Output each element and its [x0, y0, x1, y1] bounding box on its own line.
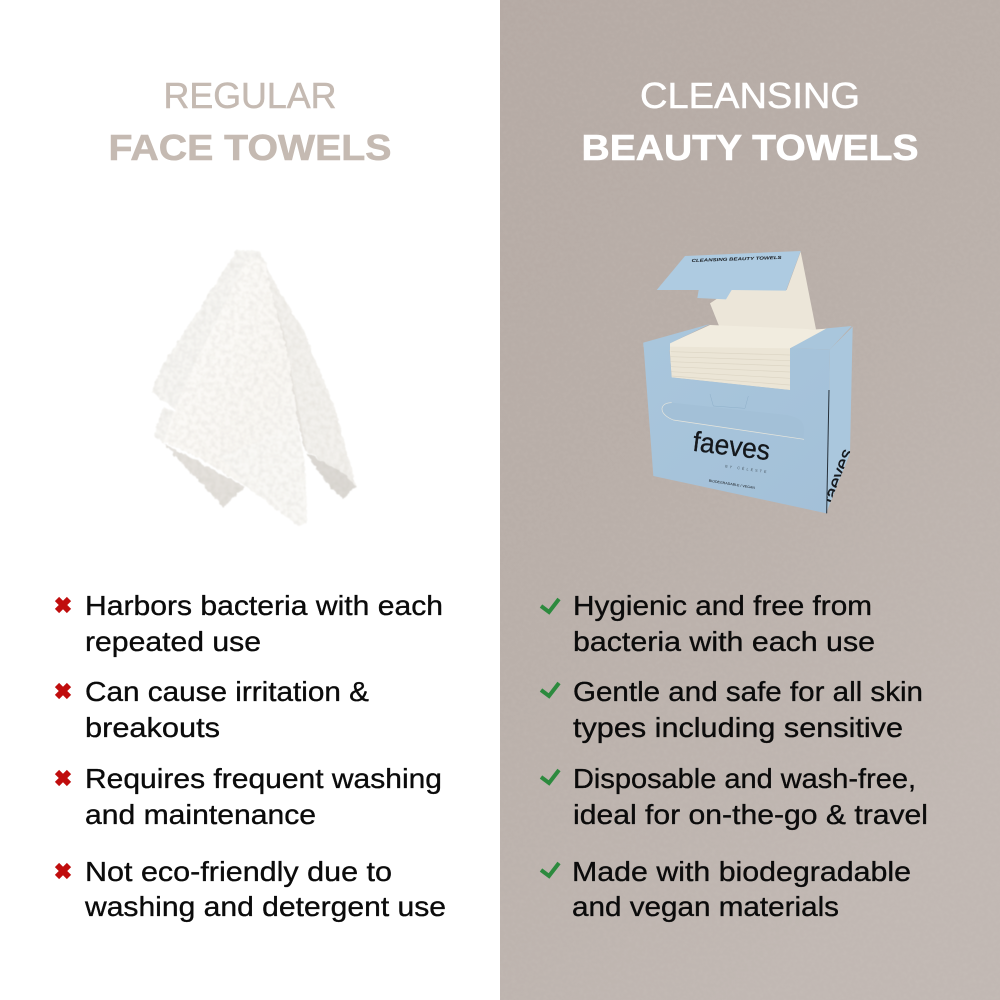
item: can cause irritation: breakouts	[85, 712, 220, 743]
icon: white towel photo	[152, 250, 356, 526]
item: harbors bacteria: Harbors bacteria with each	[85, 590, 443, 621]
brand text: BIODEGRADABLE / VEGAN	[709, 479, 756, 490]
item: requires washing: and maintenance	[85, 799, 316, 830]
panel: regular face towels	[0, 0, 500, 1000]
item: harbors bacteria: repeated use	[85, 626, 261, 657]
item: gentle: types including sensitive	[573, 712, 903, 743]
box top and side	[643, 324, 710, 350]
item: biodegradable: and vegan materials	[572, 891, 839, 922]
item: requires washing	[57, 763, 442, 830]
item: not eco-friendly: washing and detergent use	[84, 891, 446, 922]
heading: cleansing beauty towels	[582, 75, 918, 168]
item: disposable: Disposable and wash-free,	[573, 763, 916, 794]
item: gentle: Gentle and safe for all skin	[573, 676, 923, 707]
towel stack	[669, 325, 830, 390]
heading: regular face towels: REGULAR	[164, 75, 336, 116]
list: beauty towel benefits	[541, 590, 928, 922]
heading: regular face towels: FACE TOWELS	[108, 127, 392, 168]
heading: cleansing beauty towels: CLEANSING	[640, 75, 860, 116]
lid outside	[657, 251, 801, 299]
item: hygienic: Hygienic and free from	[573, 590, 872, 621]
brand text: BY CÉLESTE	[725, 463, 767, 474]
dispenser slot	[662, 394, 804, 439]
lid inside	[710, 252, 816, 329]
item: hygienic	[541, 590, 875, 657]
brand text: CLEANSING BEAUTY TOWELS	[692, 255, 782, 263]
item: disposable: ideal for on-the-go & travel	[573, 799, 928, 830]
item: biodegradable	[541, 856, 911, 922]
icon: faeves towel box photo	[643, 251, 857, 513]
item: disposable	[541, 763, 928, 830]
item: requires washing: Requires frequent washing	[85, 763, 442, 794]
panel: cleansing beauty towels	[500, 0, 1000, 1000]
box front	[643, 343, 830, 513]
item: can cause irritation: Can cause irritation &	[85, 676, 369, 707]
item: can cause irritation	[57, 676, 369, 743]
brand text	[691, 255, 857, 506]
brand text: faeves	[818, 446, 857, 506]
item: not eco-friendly: Not eco-friendly due to	[85, 856, 392, 887]
heading: cleansing beauty towels: BEAUTY TOWELS	[582, 127, 918, 168]
item: harbors bacteria	[57, 590, 443, 657]
item: biodegradable: Made with biodegradable	[572, 856, 911, 887]
item: gentle	[541, 676, 923, 743]
heading: regular face towels	[108, 75, 392, 168]
item: not eco-friendly	[57, 856, 446, 922]
list: regular towel drawbacks	[57, 590, 446, 922]
brand text: faeves	[691, 426, 772, 466]
item: hygienic: bacteria with each use	[573, 626, 875, 657]
